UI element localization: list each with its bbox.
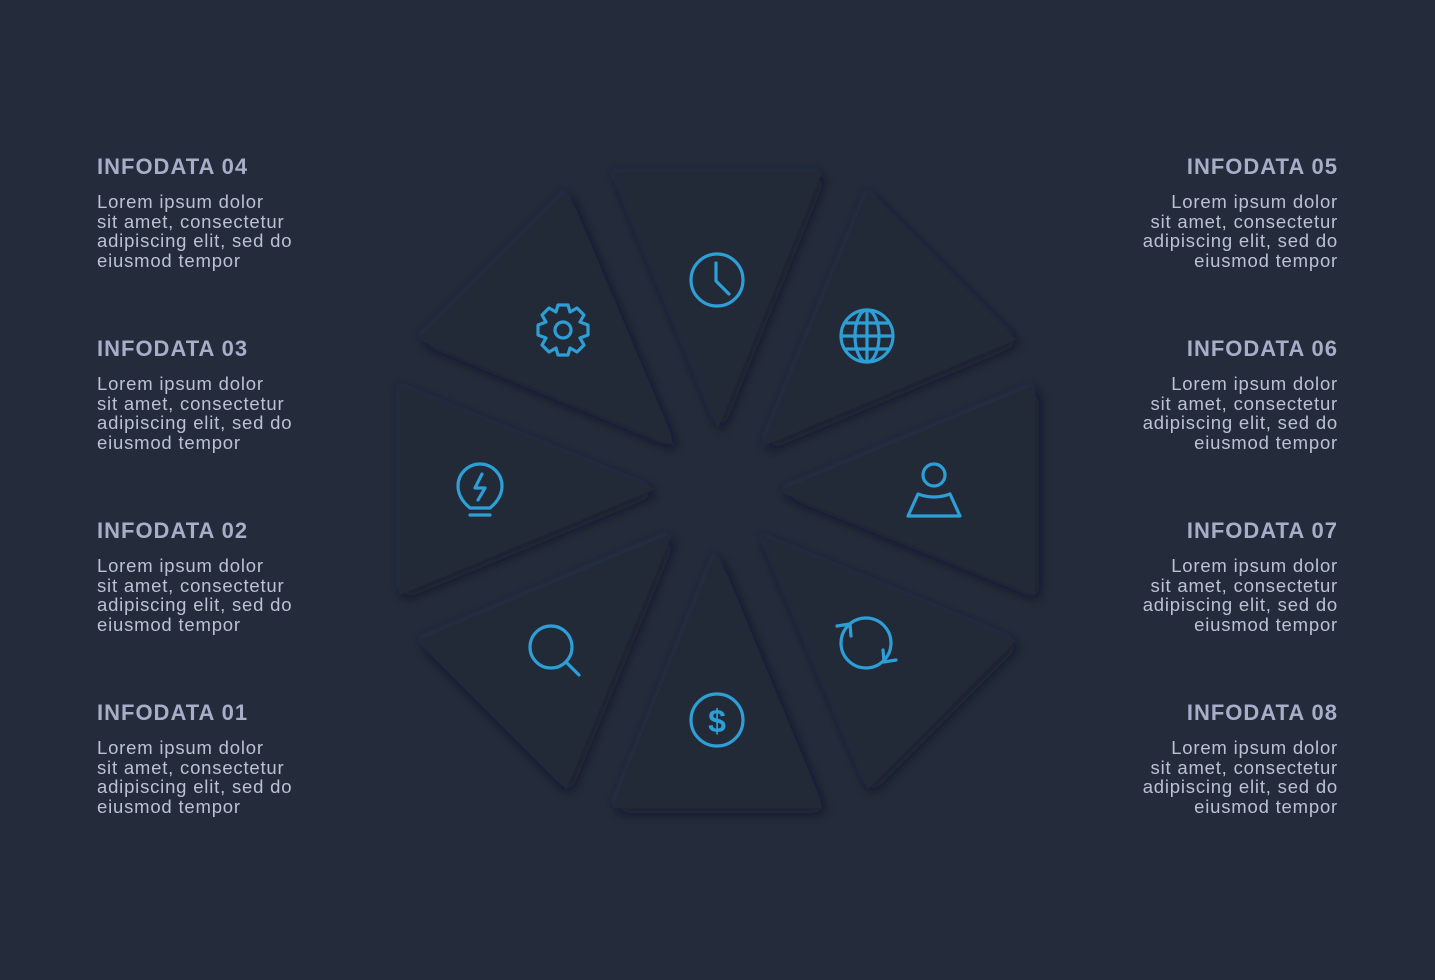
triangle: right xyxy=(779,385,1035,595)
triangle: left xyxy=(399,385,655,595)
text: infodata 03: Lorem ipsum dolor xyxy=(97,373,264,394)
text: infodata 08: INFODATA 08 xyxy=(1187,700,1338,725)
triangle: top-left xyxy=(418,191,747,520)
text: infodata 06 xyxy=(1143,336,1338,453)
icon: search xyxy=(530,626,579,675)
text: infodata 04 xyxy=(97,154,292,271)
text: infodata 02: adipiscing elit, sed do xyxy=(97,594,292,615)
text: infodata 04: INFODATA 04 xyxy=(97,154,248,179)
triangle: top-right xyxy=(687,191,1016,520)
text: infodata 01: eiusmod tempor xyxy=(97,796,241,817)
triangle: bottom-left xyxy=(418,460,747,789)
triangle: bottom-right xyxy=(687,460,1016,789)
icon: gear xyxy=(538,305,588,355)
text: infodata 02 xyxy=(97,518,292,635)
text: infodata 08: adipiscing elit, sed do xyxy=(1143,776,1338,797)
icon: globe xyxy=(841,310,893,362)
text: infodata 04: sit amet, consectetur xyxy=(97,211,284,232)
text: infodata 02: eiusmod tempor xyxy=(97,614,241,635)
text: infodata 08: sit amet, consectetur xyxy=(1151,757,1338,778)
text: infodata 02: sit amet, consectetur xyxy=(97,575,284,596)
icon: dollar: $ xyxy=(708,703,726,739)
text: infodata 05: INFODATA 05 xyxy=(1187,154,1338,179)
text: infodata 06: eiusmod tempor xyxy=(1194,432,1338,453)
text: infodata 08: Lorem ipsum dolor xyxy=(1171,737,1338,758)
text: infodata 04: adipiscing elit, sed do xyxy=(97,230,292,251)
text: infodata 07: eiusmod tempor xyxy=(1194,614,1338,635)
triangle: top xyxy=(612,172,822,428)
text: infodata 07: adipiscing elit, sed do xyxy=(1143,594,1338,615)
text: infodata 03 xyxy=(97,336,292,453)
text: infodata 06: sit amet, consectetur xyxy=(1151,393,1338,414)
text: infodata 03: sit amet, consectetur xyxy=(97,393,284,414)
text: infodata 04: eiusmod tempor xyxy=(97,250,241,271)
icon: bulb xyxy=(458,464,502,515)
text: infodata 02: Lorem ipsum dolor xyxy=(97,555,264,576)
text: infodata 06: adipiscing elit, sed do xyxy=(1143,412,1338,433)
text: infodata 08: eiusmod tempor xyxy=(1194,796,1338,817)
text: infodata 05: sit amet, consectetur xyxy=(1151,211,1338,232)
text: infodata 05: Lorem ipsum dolor xyxy=(1171,191,1338,212)
text: infodata 02: INFODATA 02 xyxy=(97,518,248,543)
text: infodata 01: INFODATA 01 xyxy=(97,700,248,725)
icon: dollar xyxy=(691,694,743,746)
icon: refresh xyxy=(837,618,896,668)
text: infodata 07: INFODATA 07 xyxy=(1187,518,1338,543)
text: infodata 01: sit amet, consectetur xyxy=(97,757,284,778)
icon: person xyxy=(908,464,960,516)
text: infodata 05: eiusmod tempor xyxy=(1194,250,1338,271)
text: infodata 05 xyxy=(1143,154,1338,271)
text: infodata 01: Lorem ipsum dolor xyxy=(97,737,264,758)
text: infodata 05: adipiscing elit, sed do xyxy=(1143,230,1338,251)
text: infodata 03: eiusmod tempor xyxy=(97,432,241,453)
text: infodata 06: Lorem ipsum dolor xyxy=(1171,373,1338,394)
text: infodata 03: adipiscing elit, sed do xyxy=(97,412,292,433)
text: infodata 08 xyxy=(1143,700,1338,817)
icon: clock xyxy=(691,254,743,306)
text: infodata 07 xyxy=(1143,518,1338,635)
text: infodata 03: INFODATA 03 xyxy=(97,336,248,361)
triangle: bottom xyxy=(612,552,822,808)
text: infodata 01 xyxy=(97,700,292,817)
text: infodata 01: adipiscing elit, sed do xyxy=(97,776,292,797)
text: infodata 07: sit amet, consectetur xyxy=(1151,575,1338,596)
text: infodata 07: Lorem ipsum dolor xyxy=(1171,555,1338,576)
text: infodata 04: Lorem ipsum dolor xyxy=(97,191,264,212)
text: infodata 06: INFODATA 06 xyxy=(1187,336,1338,361)
